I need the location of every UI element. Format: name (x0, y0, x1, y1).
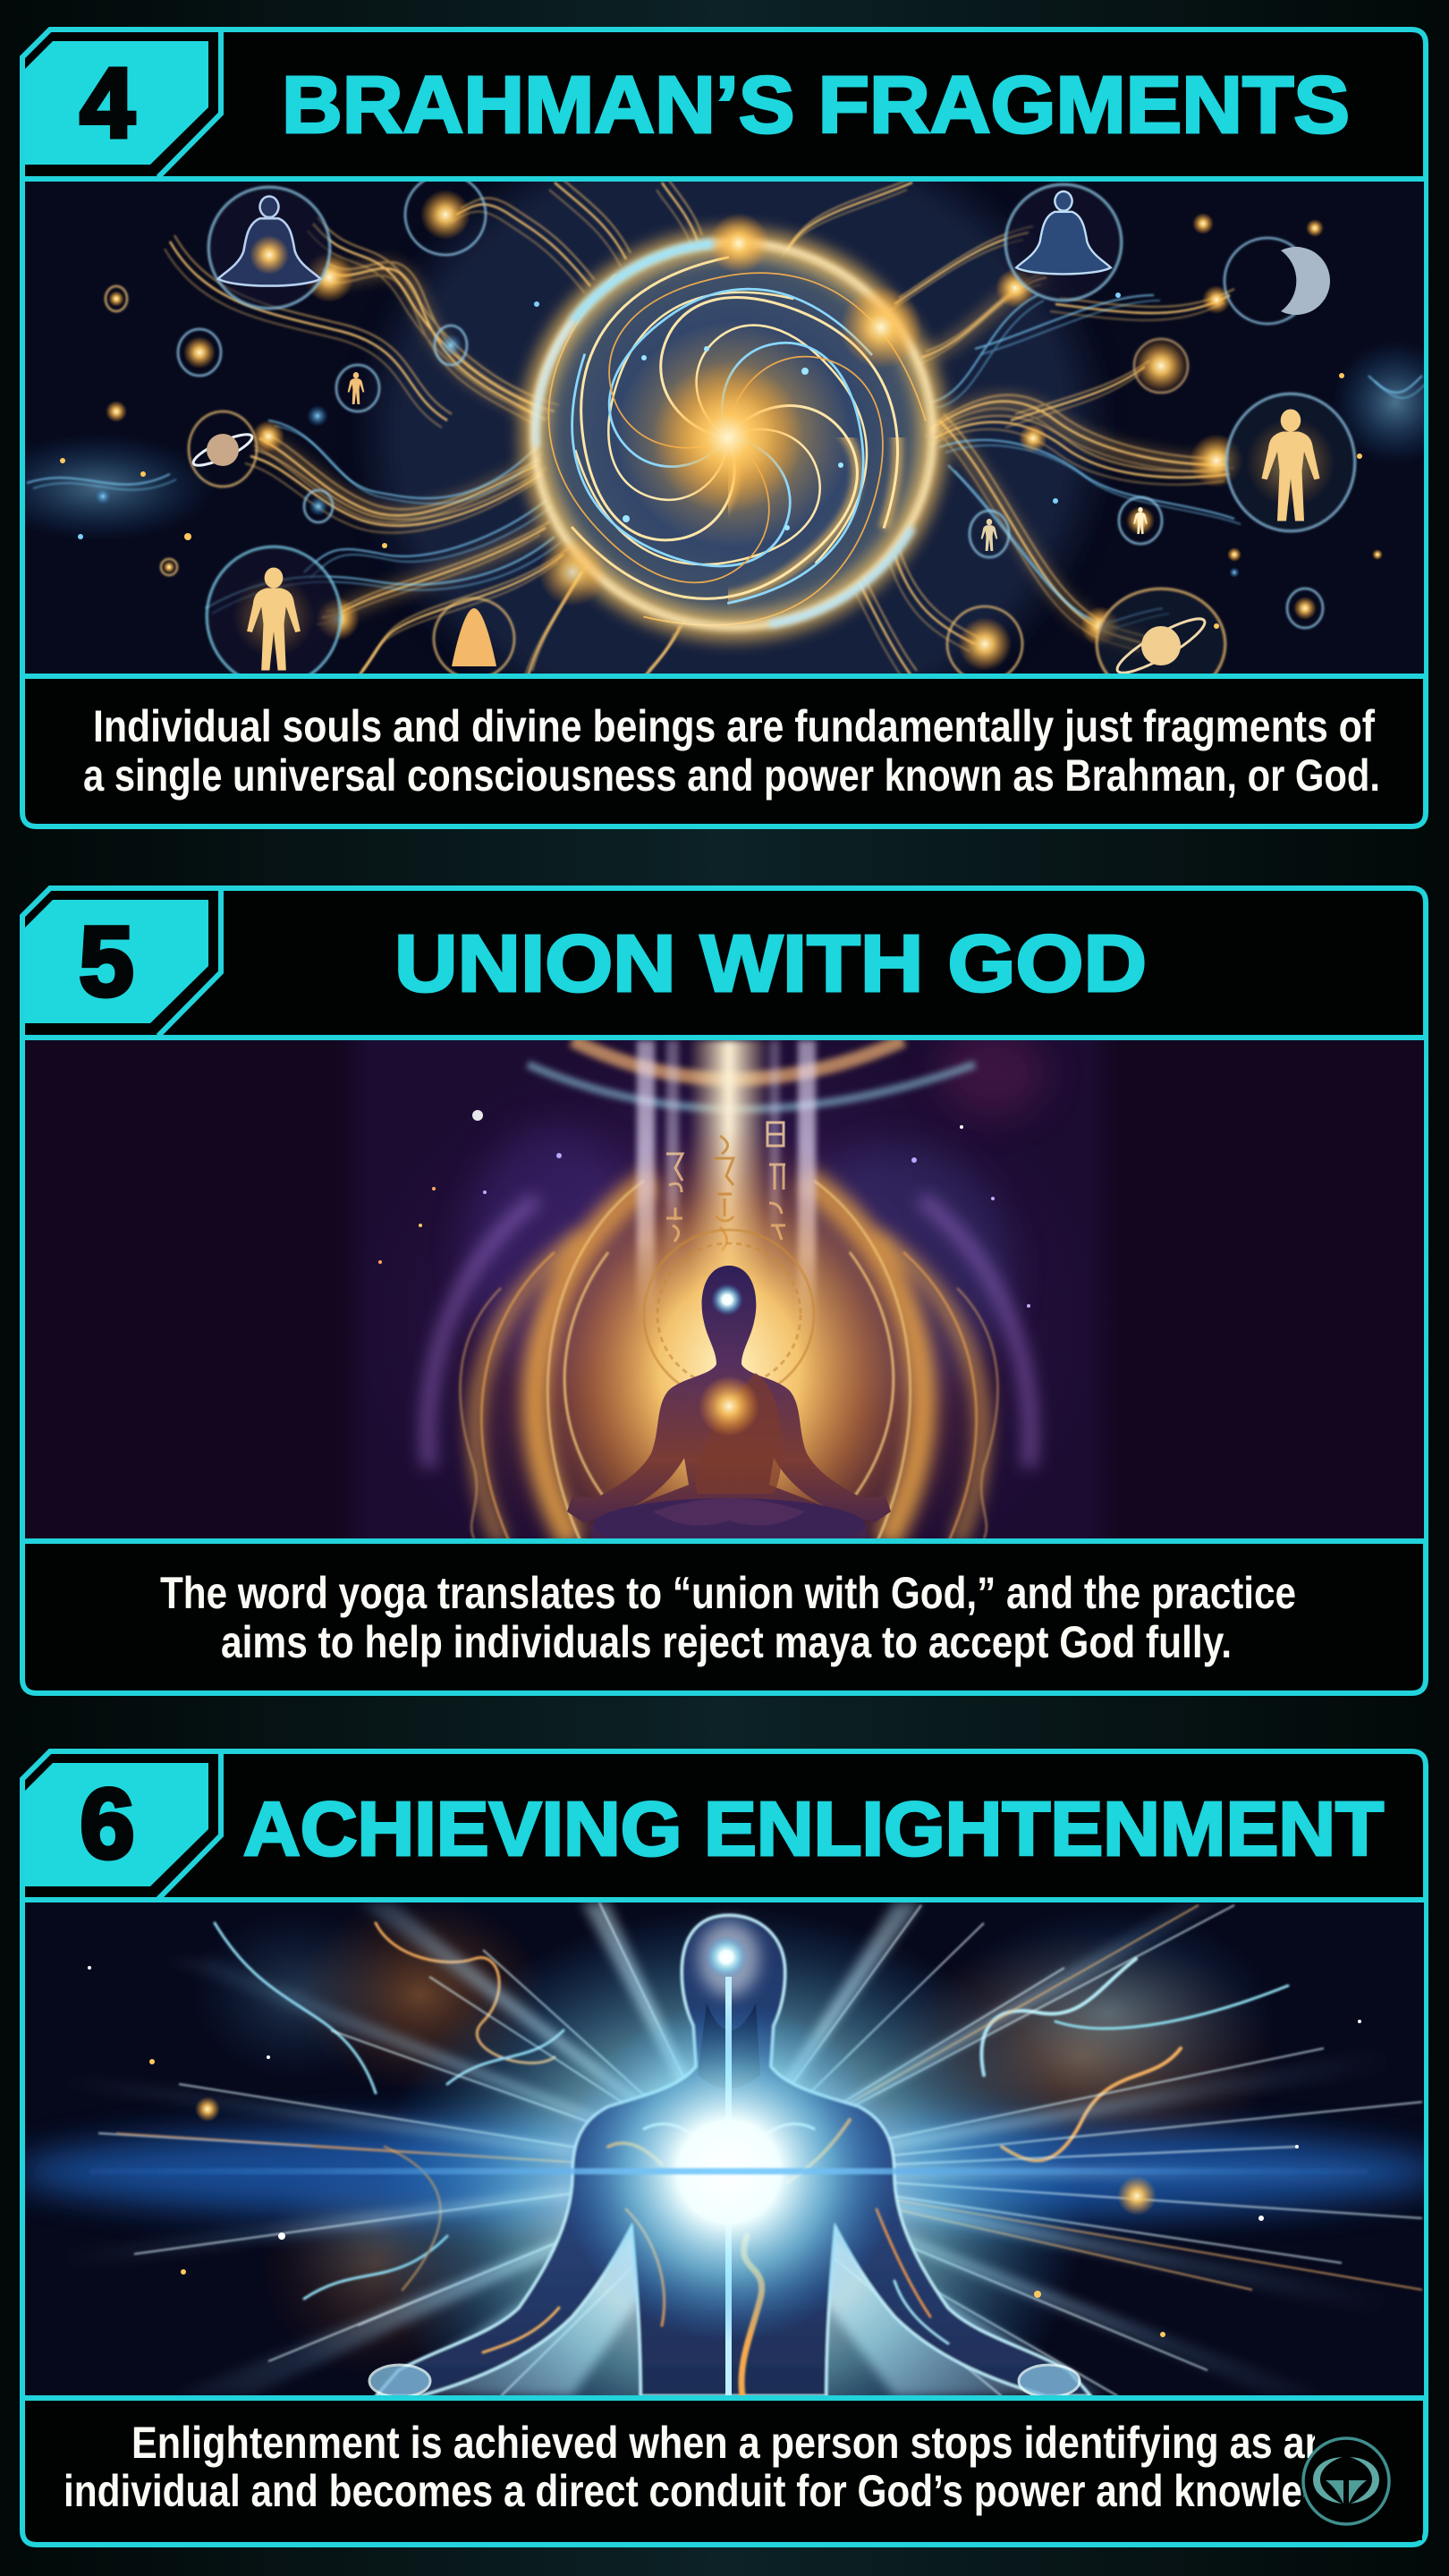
panel frame (22, 888, 1426, 1693)
body figure (376, 1915, 1091, 2396)
number badge 4: 4 (80, 48, 135, 158)
light beams (637, 1040, 816, 1344)
panel frame (22, 1751, 1426, 2545)
body text (83, 701, 1380, 801)
light rays (25, 1902, 1424, 2396)
dividers (24, 1038, 1424, 1541)
central burst (559, 2002, 899, 2342)
title: UNION WITH GOD (394, 919, 1147, 1009)
stars (60, 213, 1383, 629)
title: BRAHMAN’S FRAGMENTS (282, 61, 1350, 150)
script columns (666, 1123, 785, 1250)
panel frame (22, 30, 1426, 826)
panel: Brahman's fragments (0, 30, 1449, 826)
number badge 5: 5 (79, 907, 134, 1017)
panel: achieving enlightenment (13, 1751, 1445, 2545)
illustration: spiral universe with soul bubbles (25, 182, 1424, 674)
body text (64, 2418, 1380, 2516)
stars (88, 1966, 1361, 2337)
illustration: radiant enlightened body (13, 1896, 1445, 2513)
watermark logo (1303, 2415, 1422, 2540)
number badge 4 (25, 30, 221, 177)
soul bubbles (106, 174, 1355, 699)
number badge 6 (25, 1752, 221, 1899)
meditating figure (567, 1266, 891, 1552)
dividers (24, 1900, 1424, 2398)
panel: union with God (22, 888, 1426, 1693)
number badge 6: 6 (80, 1769, 135, 1879)
illustration: meditating figure with light beams (25, 1040, 1424, 1538)
title: ACHIEVING ENLIGHTENMENT (243, 1787, 1384, 1872)
galaxy arc (528, 1040, 975, 1109)
halo behind head (547, 1136, 911, 1524)
junction glows (252, 252, 1243, 646)
nebula clouds (188, 1896, 1279, 2379)
aura flames (428, 1181, 1030, 1543)
number badge 5 (25, 889, 221, 1036)
stars (378, 1110, 1030, 1308)
body text: aims to help individuals reject maya to accept God fully. (221, 1617, 1232, 1667)
body text (160, 1568, 1296, 1667)
energy veins (483, 2120, 948, 2396)
header divider (24, 179, 1424, 676)
